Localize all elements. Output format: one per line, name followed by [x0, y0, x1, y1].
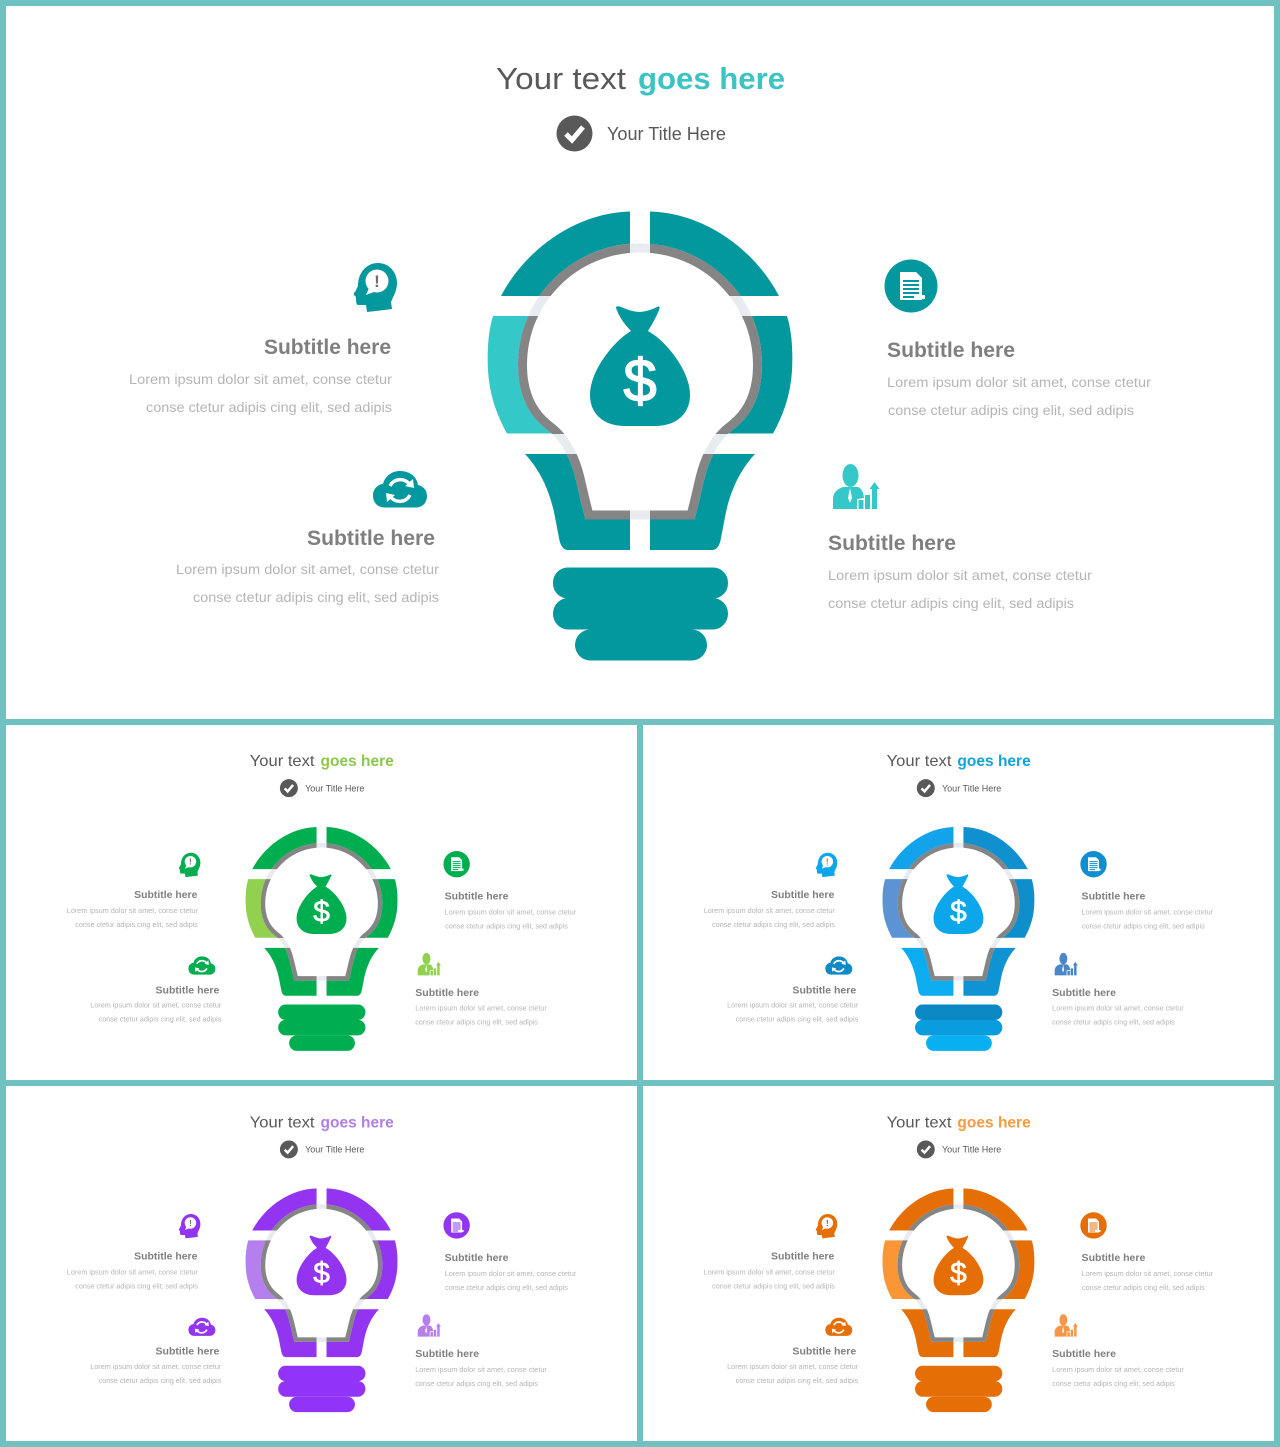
title: Your text [887, 753, 952, 770]
icon: money bag: $ [950, 1257, 967, 1290]
subtitle: your title here: Your Title Here [305, 783, 364, 793]
text block: top right [445, 1253, 577, 1292]
light bulb [883, 1188, 1034, 1412]
text block: top right [445, 892, 577, 930]
text block: bottom left [90, 1347, 222, 1385]
icon: document [443, 851, 470, 877]
text block: top left: Lorem ipsum dolor sit amet, conse ctetur [67, 1269, 199, 1276]
icon: money bag [297, 1236, 346, 1295]
text block: bottom left [727, 985, 859, 1024]
text block: bottom right: conse ctetur adipis cing elit, sed adipis [415, 1381, 538, 1388]
icon: businessman with chart [833, 464, 880, 509]
text block: bottom left: conse ctetur adipis cing elit, sed adipis [736, 1378, 859, 1385]
text block: top right: Subtitle here [1082, 892, 1146, 903]
panel: main teal [6, 6, 1274, 719]
text block: bottom left [90, 985, 222, 1024]
icon: money bag [934, 1236, 983, 1295]
text block: top left: Subtitle here [771, 1251, 834, 1262]
text block: top left: Lorem ipsum dolor sit amet, conse ctetur [129, 371, 392, 387]
text block: bottom right [415, 988, 548, 1027]
title: goes here [638, 61, 785, 96]
text block: top right: Lorem ipsum dolor sit amet, conse ctetur [445, 1271, 577, 1278]
text block: top left [704, 1251, 836, 1290]
icon: check badge [917, 1140, 935, 1158]
icon: document [884, 260, 938, 312]
panel: blue variant [643, 725, 1274, 1080]
text block: top left: Subtitle here [771, 890, 834, 901]
icon: head with alert [816, 1214, 837, 1238]
icon: head with alert [816, 853, 837, 877]
text block: top left: Lorem ipsum dolor sit amet, conse ctetur [67, 908, 199, 915]
light bulb [488, 212, 792, 660]
icon: document [1080, 1212, 1107, 1239]
text block: bottom right: Subtitle here [1052, 1349, 1116, 1360]
text block: top left: conse ctetur adipis cing elit, sed adipis [146, 399, 392, 415]
text block: top left [129, 336, 392, 415]
title: goes here [321, 753, 394, 770]
text block: top left: conse ctetur adipis cing elit, sed adipis [712, 1283, 835, 1290]
text block: bottom right: Subtitle here [415, 988, 479, 999]
icon: head with alert: ! [826, 857, 829, 867]
icon: cloud sync [825, 1318, 852, 1336]
text block: top right: conse ctetur adipis cing elit, sed adipis [1082, 1285, 1205, 1292]
icon: head with alert [354, 263, 397, 312]
text block: bottom right: conse ctetur adipis cing elit, sed adipis [1052, 1020, 1175, 1027]
icon: check badge [917, 779, 935, 797]
text block: top right: Subtitle here [887, 339, 1015, 362]
icon: head with alert [179, 853, 200, 877]
icon: head with alert: ! [826, 1218, 829, 1228]
text block: bottom right: conse ctetur adipis cing elit, sed adipis [415, 1020, 538, 1027]
text block: top right: conse ctetur adipis cing elit, sed adipis [445, 1285, 568, 1292]
text block: top left: conse ctetur adipis cing elit, sed adipis [75, 1283, 198, 1290]
text block: bottom left: conse ctetur adipis cing elit, sed adipis [99, 1017, 222, 1024]
text block: bottom left: Subtitle here [156, 1347, 220, 1358]
text block: bottom right: conse ctetur adipis cing elit, sed adipis [828, 595, 1074, 611]
title [887, 753, 1031, 770]
icon: check badge [280, 1140, 298, 1158]
text block: top left: Lorem ipsum dolor sit amet, conse ctetur [704, 908, 836, 915]
text block: top right: Subtitle here [445, 892, 509, 903]
icon: money bag [934, 874, 983, 934]
icon: cloud sync [825, 956, 852, 975]
text block: bottom left: Lorem ipsum dolor sit amet, conse ctetur [90, 1003, 222, 1010]
text block: bottom right: Subtitle here [1052, 988, 1116, 999]
text block: top right: Subtitle here [1082, 1253, 1146, 1264]
title: goes here [957, 1114, 1031, 1131]
text block: top left: conse ctetur adipis cing elit, sed adipis [712, 922, 835, 929]
icon: document [443, 1212, 470, 1239]
text block: bottom left: Subtitle here [792, 985, 856, 996]
text block: top left: Subtitle here [134, 890, 198, 901]
text block: bottom right [828, 532, 1092, 611]
icon: businessman with chart [418, 1314, 441, 1337]
text block: top left: Subtitle here [134, 1251, 198, 1262]
text block: bottom right [1052, 988, 1184, 1027]
text block: bottom right [1052, 1349, 1184, 1388]
text block: top right: conse ctetur adipis cing elit, sed adipis [445, 923, 568, 930]
title [250, 1114, 394, 1131]
text block: bottom right [415, 1349, 548, 1388]
icon: businessman with chart [1055, 953, 1078, 975]
icon: check badge [556, 116, 592, 152]
text block: top right: Lorem ipsum dolor sit amet, conse ctetur [1082, 910, 1214, 917]
title: Your text [496, 61, 626, 96]
icon: document [1080, 851, 1107, 877]
title: Your text [250, 753, 315, 770]
text block: bottom left: Lorem ipsum dolor sit amet, conse ctetur [727, 1003, 859, 1010]
title: Your text [250, 1114, 315, 1131]
text block: bottom left: conse ctetur adipis cing elit, sed adipis [193, 589, 439, 605]
text block: bottom left: Lorem ipsum dolor sit amet, conse ctetur [727, 1364, 859, 1371]
text block: bottom left: Subtitle here [156, 985, 220, 996]
text block: bottom left: conse ctetur adipis cing elit, sed adipis [736, 1017, 859, 1024]
text block: top right [887, 339, 1151, 418]
light bulb [883, 827, 1034, 1051]
icon: money bag [297, 874, 346, 934]
text block: top right: Lorem ipsum dolor sit amet, conse ctetur [1082, 1271, 1214, 1278]
icon: cloud sync [188, 1318, 215, 1336]
text block: bottom right: Lorem ipsum dolor sit amet, conse ctetur [828, 567, 1092, 583]
text block: bottom left [727, 1347, 859, 1385]
title: Your text [887, 1114, 952, 1131]
panel: purple variant [6, 1086, 637, 1441]
text block: top right: conse ctetur adipis cing elit, sed adipis [888, 402, 1134, 418]
subtitle: your title here: Your Title Here [305, 1145, 364, 1155]
icon: cloud sync [373, 471, 427, 508]
text block: bottom left [176, 527, 439, 605]
text block: bottom right: conse ctetur adipis cing elit, sed adipis [1052, 1381, 1175, 1388]
icon: businessman with chart [1055, 1314, 1078, 1337]
text block: bottom left: conse ctetur adipis cing elit, sed adipis [99, 1378, 222, 1385]
text block: top left [704, 890, 836, 929]
text block: bottom right: Subtitle here [828, 532, 956, 555]
light bulb [246, 827, 397, 1051]
subtitle: your title here: Your Title Here [942, 1145, 1001, 1155]
text block: top right [1082, 1253, 1214, 1292]
icon: money bag: $ [313, 1257, 330, 1290]
text block: top right: conse ctetur adipis cing elit, sed adipis [1082, 923, 1205, 930]
subtitle: your title here: Your Title Here [942, 783, 1001, 793]
icon: businessman with chart [418, 953, 441, 975]
text block: top left [67, 1251, 199, 1290]
icon: money bag: $ [950, 895, 967, 928]
text block: bottom right: Subtitle here [415, 1349, 479, 1360]
title: goes here [321, 1114, 394, 1131]
text block: bottom right: Lorem ipsum dolor sit amet, conse ctetur [1052, 1367, 1184, 1374]
text block: bottom left: Subtitle here [792, 1347, 856, 1358]
icon: head with alert: ! [374, 272, 380, 291]
icon: head with alert: ! [189, 1218, 192, 1228]
title: goes here [957, 753, 1031, 770]
text block: top left: Lorem ipsum dolor sit amet, conse ctetur [704, 1269, 836, 1276]
icon: money bag: $ [623, 347, 657, 414]
text block: top left: conse ctetur adipis cing elit, sed adipis [75, 922, 198, 929]
text block: bottom right: Lorem ipsum dolor sit amet, conse ctetur [415, 1006, 548, 1013]
icon: head with alert: ! [189, 857, 192, 867]
icon: head with alert [179, 1214, 200, 1238]
subtitle: your title here: Your Title Here [607, 124, 726, 144]
text block: top left: Subtitle here [264, 336, 391, 359]
text block: bottom left: Subtitle here [307, 527, 435, 550]
text block: bottom right: Lorem ipsum dolor sit amet, conse ctetur [415, 1367, 548, 1374]
icon: money bag [590, 306, 690, 426]
text block: top right: Lorem ipsum dolor sit amet, conse ctetur [887, 374, 1151, 390]
icon: cloud sync [188, 956, 215, 975]
title [250, 753, 394, 770]
text block: bottom right: Lorem ipsum dolor sit amet, conse ctetur [1052, 1006, 1184, 1013]
text block: bottom left: Lorem ipsum dolor sit amet, conse ctetur [90, 1364, 222, 1371]
text block: top left [67, 890, 199, 929]
panel: orange variant [643, 1086, 1274, 1441]
icon: money bag: $ [313, 895, 330, 928]
panel: green variant [6, 725, 637, 1080]
text block: top right: Lorem ipsum dolor sit amet, conse ctetur [445, 910, 577, 917]
text block: top right [1082, 892, 1214, 930]
light bulb [246, 1188, 397, 1412]
icon: check badge [280, 779, 298, 797]
text block: top right: Subtitle here [445, 1253, 509, 1264]
title [887, 1114, 1031, 1131]
title [496, 61, 785, 96]
text block: bottom left: Lorem ipsum dolor sit amet, conse ctetur [176, 561, 439, 577]
